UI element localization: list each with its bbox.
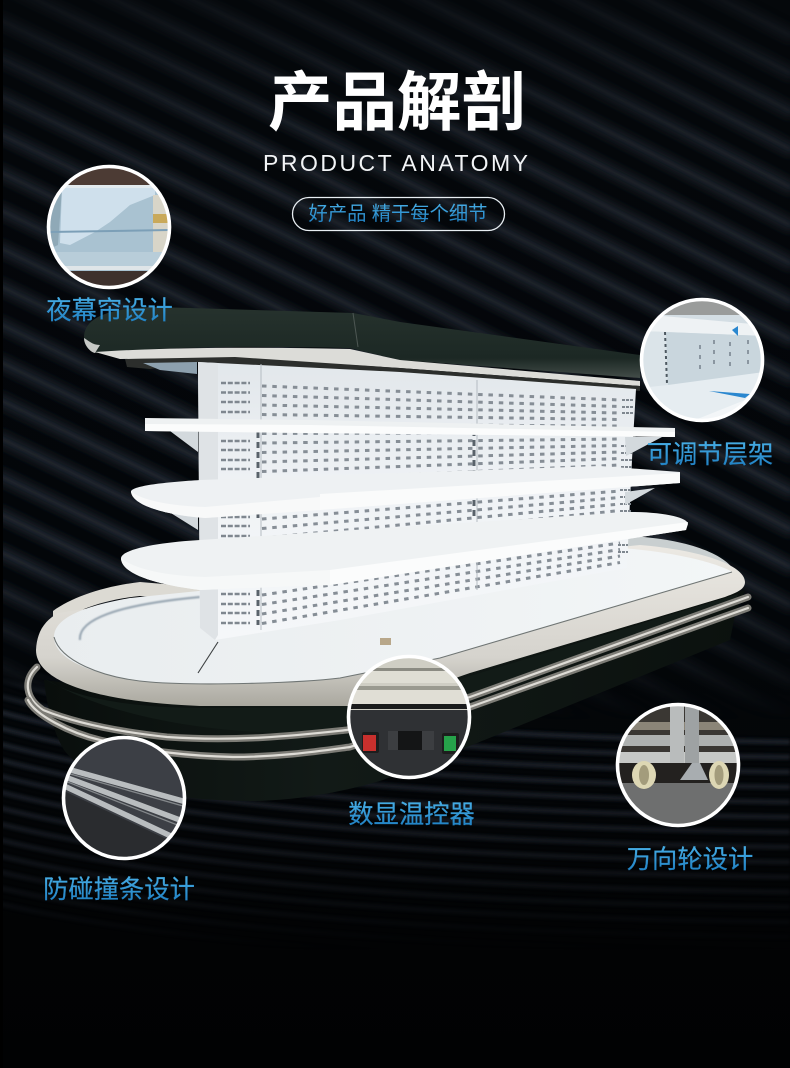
slogan pill: 好产品 精于每个细节 (309, 203, 487, 225)
white display floor (54, 548, 732, 684)
subtitle: PRODUCT ANATOMY: PRODUCT ANATOMY (263, 150, 528, 176)
back guard right (628, 536, 735, 580)
label: 夜幕帘设计: 夜幕帘设计 (46, 297, 173, 325)
small floor clip (380, 638, 391, 645)
shelf 2 (131, 466, 680, 530)
shelf 1 (145, 418, 675, 456)
detail circle: caster wheels (617, 703, 741, 827)
label: 数显温控器: 数显温控器 (348, 801, 475, 829)
label: 可调节层架: 可调节层架 (647, 441, 773, 469)
stainless rails (28, 597, 748, 757)
label: 万向轮设计: 万向轮设计 (627, 846, 753, 874)
slogan pill (292, 198, 504, 230)
canopy light strip (95, 348, 640, 386)
canopy (84, 307, 640, 378)
detail circle: anti-collision strip (60, 736, 190, 862)
back guard left (53, 582, 200, 628)
detail circle: night curtain (47, 165, 171, 291)
title: 产品解剖: 产品解剖 (268, 67, 526, 139)
perforated back panel (198, 362, 636, 640)
label: 防碰撞条设计: 防碰撞条设计 (43, 876, 195, 904)
case dark lower body (44, 590, 745, 801)
product: open refrigerated display case (28, 307, 748, 801)
detail circle: digital thermostat (347, 655, 471, 779)
shelf 3 (121, 512, 688, 590)
detail circle: adjustable shelf (640, 298, 770, 422)
top ring of case (36, 545, 745, 706)
dark band beneath ring (44, 594, 738, 733)
